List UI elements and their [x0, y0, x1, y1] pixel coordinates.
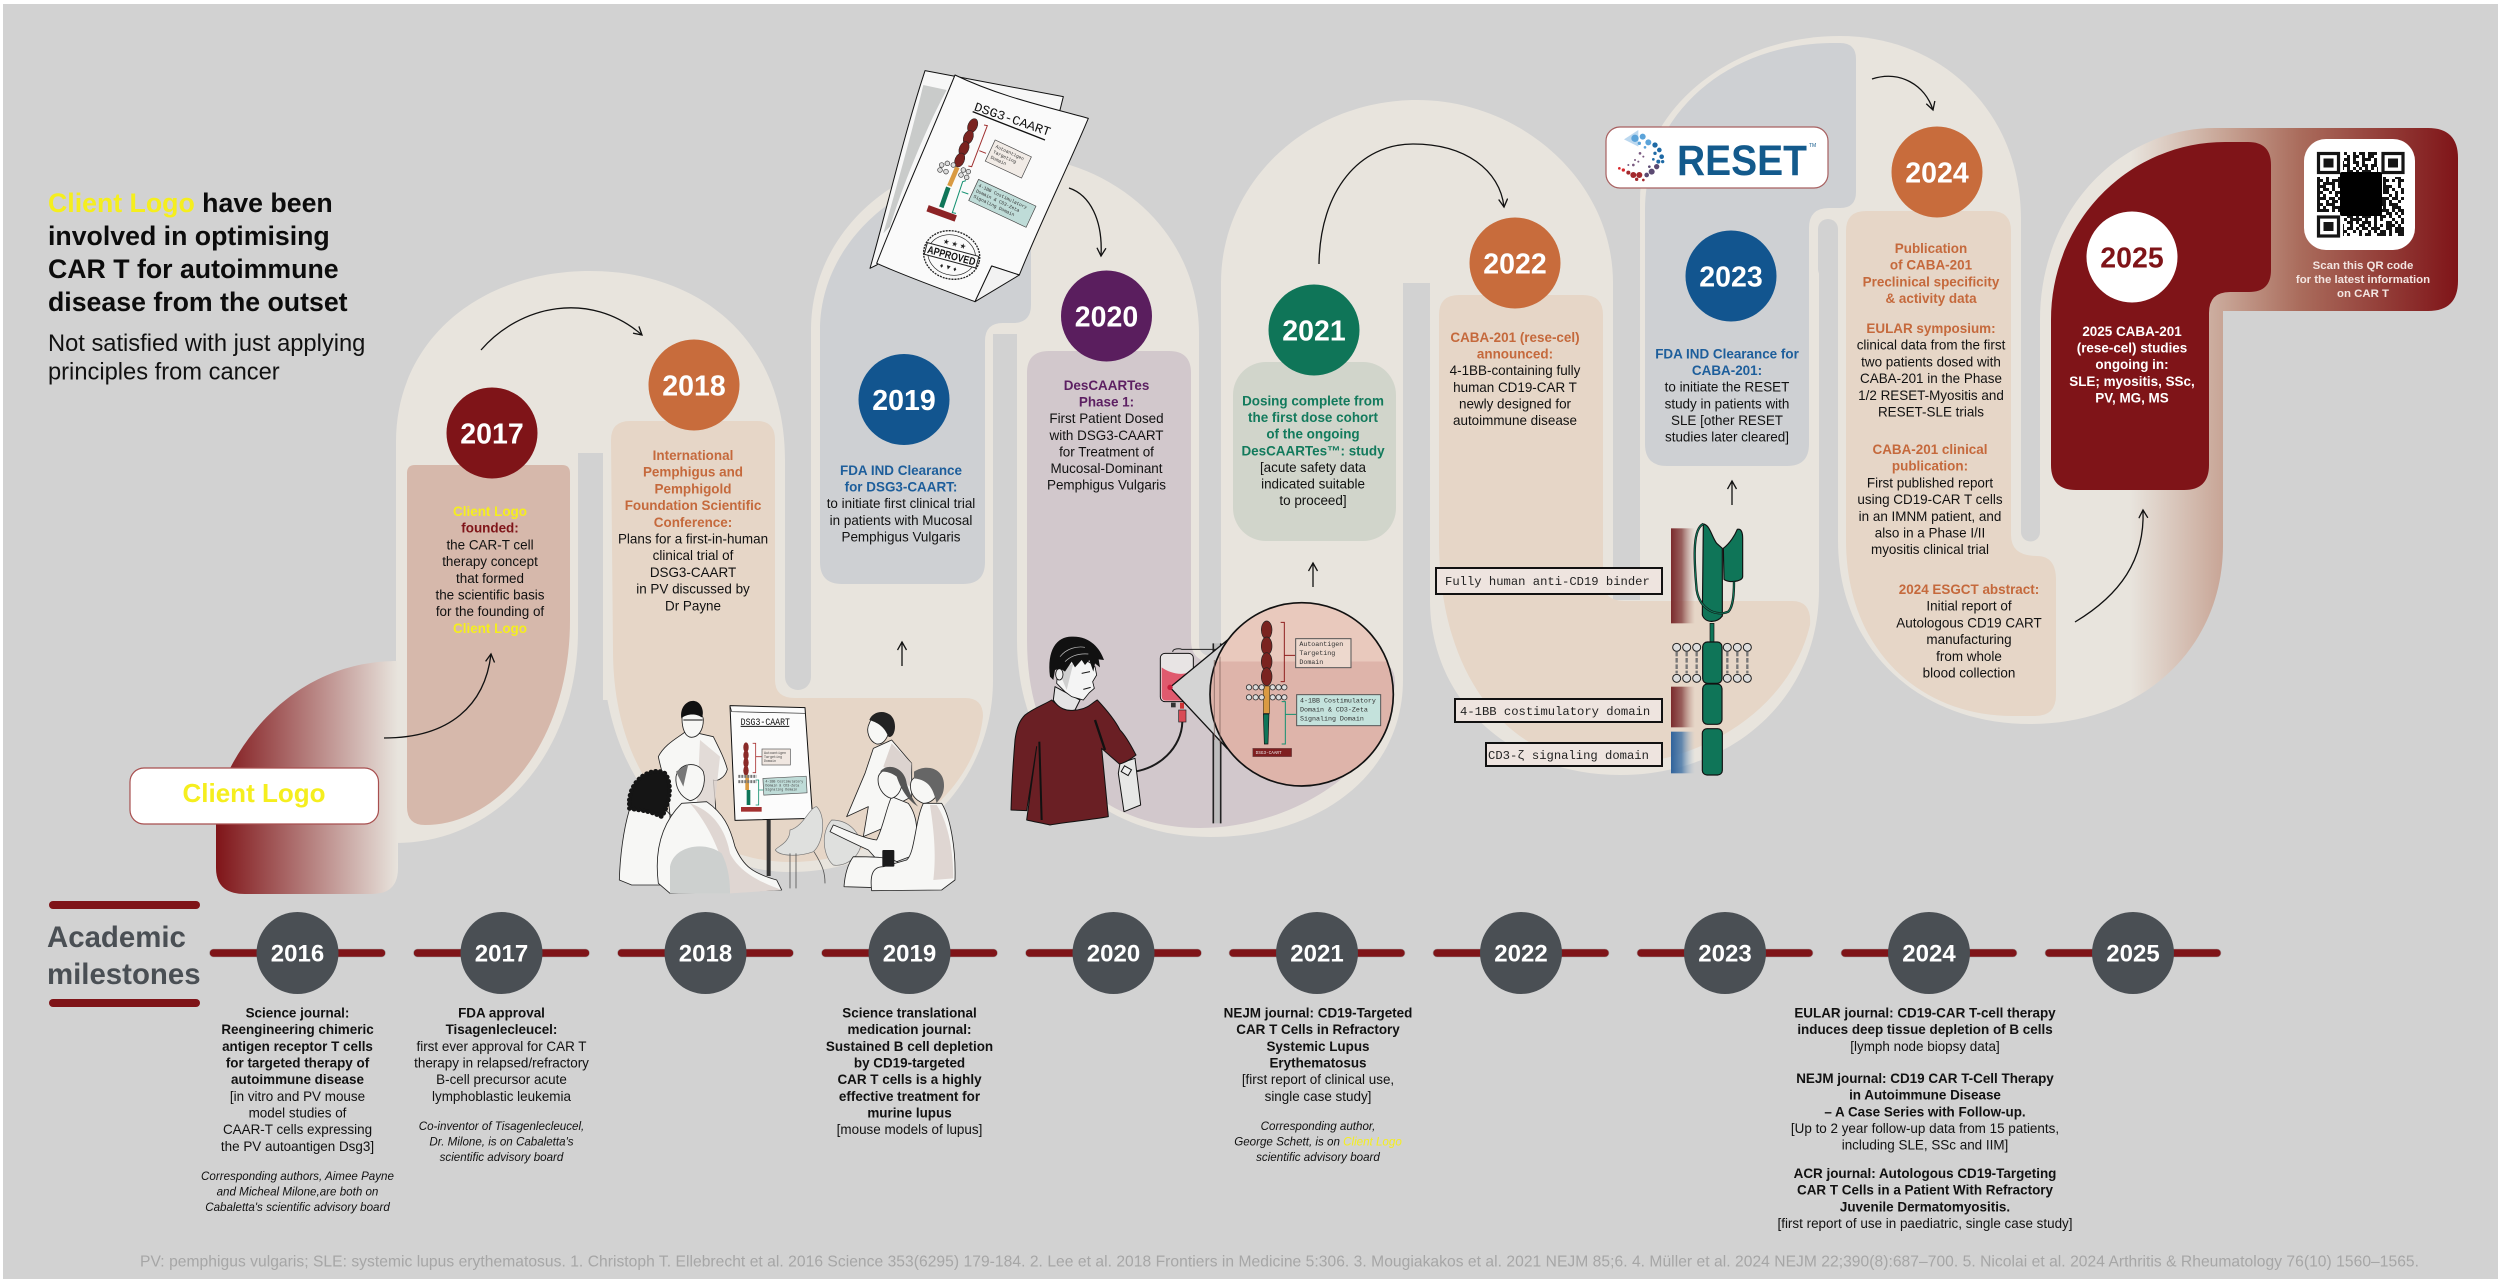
- panel: 2024: & activity data: [1885, 291, 1977, 306]
- ribbon: gradient start: [216, 661, 398, 894]
- panel: 2024: myositis clinical trial: [1871, 542, 1989, 557]
- academic note: 2017: B-cell precursor acute: [436, 1072, 567, 1087]
- panel: 2024: 2024 ESGCT abstract:: [1899, 582, 2039, 597]
- panel: 2023: study in patients with: [1665, 396, 1789, 411]
- panel: 2025: PV, MG, MS: [2095, 390, 2169, 405]
- figure: grey-haired seated person: [657, 764, 782, 893]
- intro heading: Client Logo have been: [48, 188, 333, 218]
- panel: 2018: clinical trial of: [653, 548, 734, 563]
- label: 4-1BB domain: 4-1BB costimulatory domain: [1460, 705, 1650, 719]
- panel: 2024: publication:: [1892, 459, 1968, 474]
- figure: seated person with cup: [871, 768, 955, 891]
- magnifier circle: [1210, 603, 1393, 786]
- illustration: approved DSG3-CAART document: Domain: [989, 155, 1007, 167]
- panel: 2018: [611, 340, 983, 862]
- panel: 2021: the first dose cohort: [1248, 410, 1378, 425]
- flip chart: 4-1BB Costimulatory: [765, 780, 803, 784]
- academic note: 2016: [201, 1006, 395, 1214]
- panel: 2024: two patients dosed with: [1861, 354, 2001, 369]
- panel: 2024: [1846, 126, 2056, 716]
- academic note: 2024: [first report of use in paediatric, single case study]: [1777, 1216, 2073, 1231]
- panel: 2024: Preclinical specificity: [1863, 274, 2000, 289]
- QR caption: for the latest information: [2296, 274, 2430, 286]
- panel: 2020: First Patient Dosed: [1049, 411, 1164, 426]
- academic note: 2019: [mouse models of lupus]: [837, 1122, 982, 1137]
- academic note: 2016: model studies of: [249, 1106, 347, 1121]
- figure: curly-haired seated person: [619, 771, 670, 885]
- flip chart: Autoantigen: [764, 751, 786, 755]
- academic timeline year nodes: [256, 912, 2174, 994]
- intro heading: CAR T for autoimmune: [48, 254, 339, 284]
- panel: 2022: CABA-201 (rese-cel): [1450, 330, 1580, 345]
- panel: 2020: Phase 1:: [1079, 395, 1134, 410]
- panel: 2021: 2021: [1282, 316, 1346, 348]
- panel: 2017: the CAR-T cell: [446, 537, 534, 552]
- panel: 2024: manufacturing: [1926, 632, 2012, 647]
- academic note: 2021: NEJM journal: CD19-Targeted: [1224, 1006, 1412, 1020]
- RESET logo: TM: [1809, 143, 1816, 149]
- slots between ribbon columns: [785, 219, 1838, 690]
- panel: 2023: SLE [other RESET: [1671, 413, 1783, 428]
- panel: 2022: 4-1BB-containing fully: [1450, 363, 1581, 378]
- label: anti-CD19 binder: Fully human anti-CD19 binder: [1445, 575, 1650, 589]
- academic timeline year nodes: 2023: [1698, 940, 1752, 968]
- illustration: approved DSG3-CAART document: Domain & CD3-Zeta: [975, 188, 1021, 214]
- academic note: 2016: the PV autoantigen Dsg3]: [221, 1139, 374, 1154]
- figure: standing presenter: [658, 701, 727, 815]
- academic note: 2021: Corresponding author,: [1261, 1120, 1375, 1133]
- magnifier circle: Signaling Domain: [1300, 715, 1364, 723]
- magnifier circle: Autoantigen: [1299, 640, 1343, 648]
- panel: 2018: DSG3-CAART: [650, 565, 736, 580]
- panel: 2022: 2022: [1483, 248, 1547, 280]
- academic note: 2021: [first report of clinical use,: [1242, 1072, 1394, 1087]
- academic note: 2016: for targeted therapy of: [226, 1056, 370, 1071]
- academic note: 2017: scientific advisory board: [440, 1151, 564, 1164]
- panel: 2024: RESET-SLE trials: [1878, 404, 1984, 420]
- academic note: 2024: EULAR journal: CD19-CAR T-cell therapy: [1794, 1006, 2056, 1020]
- academic note: 2024: ACR journal: Autologous CD19-Targeting: [1794, 1166, 2056, 1181]
- figure: standing observer: [847, 712, 912, 837]
- panel: 2025: [2051, 142, 2271, 490]
- academic note: 2016: Science journal:: [246, 1006, 349, 1020]
- illustration: team meeting at flip chart: [619, 701, 955, 893]
- intro heading: principles from cancer: [48, 360, 280, 386]
- panel: 2018: 2018: [662, 370, 726, 402]
- panel: 2022: [1439, 218, 1810, 765]
- flip chart: Domain: [764, 759, 776, 763]
- panel: 2024: clinical data from the first: [1857, 338, 2006, 353]
- illustration: approved DSG3-CAART document: ♦ ▼ ♦: [939, 262, 958, 274]
- academic note: 2017: FDA approval: [458, 1006, 545, 1020]
- panel: 2017: therapy concept: [442, 554, 538, 569]
- panel: 2022: autoimmune disease: [1453, 413, 1577, 428]
- panel: 2019: to initiate first clinical trial: [827, 496, 975, 511]
- academic timeline bars: [210, 949, 2221, 957]
- panel: 2019: Pemphigus Vulgaris: [841, 529, 961, 544]
- figure: seated woman: [830, 767, 918, 888]
- magnifier circle: 4-1BB Costimulatory: [1300, 697, 1376, 705]
- panel: 2022: announced:: [1477, 347, 1553, 362]
- panel: 2020: for Treatment of: [1059, 444, 1154, 459]
- panel: 2018: Dr Payne: [665, 598, 721, 613]
- flip chart: [730, 706, 813, 876]
- academic note: 2024: CAR T Cells in a Patient With Refractory: [1797, 1183, 2054, 1198]
- panel: 2024: CABA-201 clinical: [1872, 442, 1988, 457]
- panel: 2023: [1645, 43, 1856, 466]
- illustration: approved DSG3-CAART document: 4-1BB Costimulatory: [977, 183, 1028, 211]
- academic note: 2017: [414, 1006, 589, 1164]
- illustration: CD19 CAR receptor: [1671, 524, 1751, 775]
- panel: 2020: DesCAARTes: [1064, 378, 1149, 393]
- magnifier circle: Domain: [1299, 658, 1323, 666]
- academic timeline year nodes: 2024: [1902, 940, 1956, 968]
- academic note: 2016: [in vitro and PV mouse: [230, 1089, 365, 1104]
- panel: 2023: FDA IND Clearance for: [1655, 346, 1800, 362]
- panel: 2024: EULAR symposium:: [1866, 321, 1996, 336]
- panel: 2025: 2025 CABA-201: [2082, 324, 2182, 339]
- academic note: 2021: [1224, 1006, 1412, 1164]
- panel: 2022: newly designed for: [1459, 396, 1572, 411]
- panel: 2020: Mucosal-Dominant: [1050, 461, 1163, 476]
- panel: 2025: SLE; myositis, SSc,: [2069, 374, 2195, 389]
- panel: 2025: 2025: [2100, 242, 2164, 274]
- client logo box: Client Logo: [183, 778, 325, 808]
- tube: [1128, 722, 1182, 772]
- panel: 2025: (rese-cel) studies: [2077, 341, 2187, 356]
- panel: 2017: that formed: [456, 571, 524, 586]
- panel: 2024: Initial report of: [1926, 599, 2012, 614]
- IV pole: [1213, 643, 1221, 823]
- panel: 2018: Conference:: [654, 515, 732, 530]
- magnifier circle: Domain & CD3-Zeta: [1300, 706, 1368, 714]
- academic timeline year nodes: 2022: [1494, 940, 1548, 968]
- patient: [1011, 637, 1141, 825]
- panel: 2018: Pemphigold: [655, 481, 731, 496]
- label: CD3 zeta domain: CD3-ζ signaling domain: [1488, 749, 1649, 763]
- panel: 2024: Autologous CD19 CART: [1896, 615, 2042, 630]
- panel: 2020: 2020: [1075, 302, 1138, 334]
- arrows between milestones: [384, 76, 2143, 738]
- academic note: 2017: Tisagenlecleucel:: [446, 1022, 557, 1037]
- academic note: 2016: Corresponding authors, Aimee Payne: [201, 1170, 395, 1183]
- academic note: 2021: Erythematosus: [1269, 1056, 1367, 1071]
- academic note: 2019: CAR T cells is a highly: [837, 1072, 982, 1087]
- academic note: 2017: therapy in relapsed/refractory: [414, 1056, 589, 1071]
- magnifier circle: Targeting: [1299, 649, 1335, 657]
- panel: 2019: FDA IND Clearance: [840, 463, 963, 478]
- panel: 2024: First published report: [1867, 475, 1993, 490]
- panel: 2024: CABA-201 in the Phase: [1860, 371, 2002, 386]
- domain strips: [1671, 528, 1695, 773]
- academic note: 2016: Reengineering chimeric: [221, 1022, 374, 1037]
- academic timeline year nodes: 2025: [2106, 940, 2160, 968]
- panel: 2024: 2024: [1905, 158, 1969, 190]
- academic milestones heading: Academic: [47, 921, 186, 954]
- academic note: 2017: lymphoblastic leukemia: [432, 1089, 571, 1104]
- panel: 2018: Plans for a first-in-human: [618, 532, 768, 546]
- illustration: approved DSG3-CAART document: DSG3-CAART: [972, 100, 1053, 140]
- academic note: 2024: [lymph node biopsy data]: [1850, 1039, 2000, 1054]
- academic milestones heading: milestones: [47, 958, 201, 991]
- RESET logo: RESET: [1677, 137, 1807, 185]
- panel: 2017: 2017: [460, 418, 524, 450]
- academic note: 2019: effective treatment for: [839, 1089, 981, 1104]
- academic note: 2019: medication journal:: [848, 1022, 971, 1037]
- academic note: 2024: induces deep tissue depletion of B cells: [1797, 1022, 2053, 1037]
- panel: 2019: 2019: [872, 385, 936, 417]
- academic note: 2024: in Autoimmune Disease: [1849, 1088, 2001, 1103]
- illustration: approved DSG3-CAART document: Targeting: [992, 149, 1017, 165]
- panel: 2024: using CD19-CAR T cells: [1857, 492, 2003, 507]
- panel: 2023: to initiate the RESET: [1665, 380, 1789, 395]
- panel: 2017: founded:: [461, 521, 519, 536]
- panel: 2017: Client Logo: [453, 621, 527, 636]
- label: anti-CD19 binder: [1436, 568, 1662, 594]
- flip chart: DSG3-CAART: [741, 717, 790, 728]
- magnifier cone: [1170, 637, 1231, 749]
- panel: 2017: [407, 388, 570, 825]
- academic timeline year nodes: 2016: [271, 940, 324, 968]
- footnote references: PV: pemphigus vulgaris; SLE: systemic lupus erythematosus. 1. Christoph T. Ellebrecht et al. 2016 Science 353(6295) 179-184. 2. Lee et al. 2018 Frontiers in Medicine 5:306. 3. Mougiakakos et al. 2021 NEJM 85;6. 4. Müller et al. 2024 NEJM 22;390(8):687–700. 5. Nicolai et al. 2024 Arthritis & Rheumatology 76(10) 1560–1565.: [140, 1254, 2419, 1270]
- panel: 2023: studies later cleared]: [1665, 430, 1789, 444]
- intro heading: involved in optimising: [48, 221, 330, 251]
- panel: 2018: International: [653, 448, 733, 463]
- QR caption: on CAR T: [2337, 288, 2389, 300]
- academic note: 2019: by CD19-targeted: [854, 1056, 965, 1071]
- flip chart: Domain & CD3-Zeta: [765, 784, 799, 788]
- panel: 2021: Dosing complete from: [1242, 394, 1384, 408]
- panel: 2024: of CABA-201: [1890, 258, 1973, 273]
- blood bag: [1160, 649, 1217, 722]
- academic note: 2016: Cabaletta's scientific advisory board: [205, 1201, 390, 1214]
- panel: 2024: also in a Phase I/II: [1875, 526, 1985, 540]
- label: CD3 zeta domain: [1486, 743, 1662, 766]
- panel: 2023: 2023: [1699, 262, 1763, 294]
- panel: 2025: ongoing in:: [2095, 357, 2169, 372]
- ribbon: gradient end with 2025 section: [1838, 128, 2458, 724]
- panel: 2021: [1233, 284, 1396, 541]
- client logo box: [130, 768, 378, 824]
- panel: 2018: in PV discussed by: [636, 582, 750, 597]
- flip chart: Targeting: [764, 755, 782, 759]
- academic note: 2024: Juvenile Dermatomyositis.: [1840, 1199, 2010, 1214]
- illustration: approved DSG3-CAART document: ★ ★ ★: [942, 236, 967, 251]
- panel: 2024: Publication: [1895, 241, 1967, 256]
- academic note: 2016: and Micheal Milone,are both on: [217, 1186, 378, 1198]
- panel: 2024: 1/2 RESET-Myositis and: [1858, 388, 2004, 403]
- panel: 2020: [1027, 270, 1395, 828]
- label: 4-1BB domain: [1455, 699, 1662, 722]
- panel: 2021: of the ongoing: [1266, 427, 1360, 442]
- panel: 2020: Pemphigus Vulgaris: [1047, 478, 1166, 493]
- academic note: 2024: including SLE, SSc and IIM]: [1842, 1138, 2008, 1153]
- academic note: 2024: [Up to 2 year follow-up data from 15 patients,: [1791, 1121, 2059, 1136]
- panel: 2024: in an IMNM patient, and: [1859, 509, 2001, 524]
- academic timeline year nodes: 2017: [475, 940, 528, 968]
- panel: 2021: to proceed]: [1279, 493, 1347, 508]
- QR caption: Scan this QR code: [2313, 260, 2413, 272]
- panel: 2018: Pemphigus and: [643, 465, 743, 480]
- panel: 2024: from whole: [1936, 649, 2002, 664]
- panel: 2023: CABA-201:: [1692, 363, 1762, 378]
- academic note: 2016: antigen receptor T cells: [222, 1039, 373, 1054]
- academic note: 2021: single case study]: [1265, 1089, 1371, 1104]
- panel: 2021: DesCAARTes™: study: [1241, 443, 1385, 458]
- academic note: 2024: – A Case Series with Follow-up.: [1824, 1104, 2026, 1119]
- academic note: 2019: Sustained B cell depletion: [826, 1039, 993, 1054]
- academic note: 2019: murine lupus: [867, 1106, 952, 1121]
- academic milestones heading: [47, 901, 201, 1007]
- panel: 2019: [820, 165, 1031, 584]
- panel: 2017: Client Logo: [453, 504, 527, 519]
- academic note: 2024: NEJM journal: CD19 CAR T-Cell Therapy: [1796, 1071, 2054, 1086]
- panel: 2024: blood collection: [1923, 666, 2015, 680]
- panel: 2021: indicated suitable: [1261, 476, 1365, 492]
- academic timeline year nodes: 2018: [679, 940, 732, 968]
- academic note: 2021: CAR T Cells in Refractory: [1236, 1022, 1400, 1037]
- academic note: 2021: scientific advisory board: [1256, 1151, 1380, 1164]
- illustration: approved DSG3-CAART document: Autoantigen: [994, 144, 1025, 162]
- illustration: approved DSG3-CAART document: APPROVED: [926, 244, 977, 269]
- flip chart: Signaling Domain: [765, 788, 797, 792]
- illustration: approved DSG3-CAART document: [870, 71, 1088, 302]
- panel: 2019: in patients with Mucosal: [830, 513, 972, 528]
- panel: 2021: [acute safety data: [1260, 460, 1367, 475]
- academic note: 2024: [1777, 1006, 2073, 1231]
- illustration: patient with blood bag and magnified DSG3-CAART: [1011, 603, 1393, 825]
- ribbon: beige winding path: [396, 36, 2021, 872]
- academic timeline year nodes: 2021: [1290, 940, 1344, 968]
- panel: 2018: Foundation Scientific: [625, 498, 762, 513]
- illustration: approved DSG3-CAART document: Signaling Domain: [972, 194, 1015, 218]
- intro heading: Not satisfied with just applying: [48, 331, 365, 357]
- academic note: 2019: Science translational: [842, 1006, 977, 1020]
- academic note: 2021: George Schett, is on Client Logo: [1234, 1136, 1402, 1148]
- academic note: 2017: Co-inventor of Tisagenlecleucel,: [419, 1120, 584, 1133]
- academic timeline year nodes: 2020: [1087, 940, 1140, 968]
- academic timeline year nodes: 2019: [883, 940, 936, 968]
- RESET logo: [1606, 127, 1828, 188]
- academic note: 2021: Systemic Lupus: [1266, 1039, 1370, 1054]
- panel: 2022: human CD19-CAR T: [1453, 380, 1577, 395]
- academic note: 2016: CAAR-T cells expressing: [223, 1122, 372, 1137]
- intro heading: disease from the outset: [48, 287, 348, 317]
- panel: 2017: for the founding of: [436, 604, 544, 619]
- panel: 2020: with DSG3-CAART: [1048, 428, 1164, 443]
- panel: 2019: for DSG3-CAART:: [845, 480, 957, 495]
- academic note: 2017: first ever approval for CAR T: [416, 1039, 587, 1054]
- academic note: 2016: autoimmune disease: [231, 1072, 364, 1087]
- chairs: [775, 807, 861, 888]
- academic note: 2017: Dr. Milone, is on Cabaletta's: [429, 1136, 574, 1148]
- intro heading: [48, 188, 365, 386]
- QR code card: [2304, 139, 2415, 250]
- panel: 2017: the scientific basis: [435, 588, 545, 602]
- magnifier circle: DSG3-CAART: [1256, 751, 1282, 756]
